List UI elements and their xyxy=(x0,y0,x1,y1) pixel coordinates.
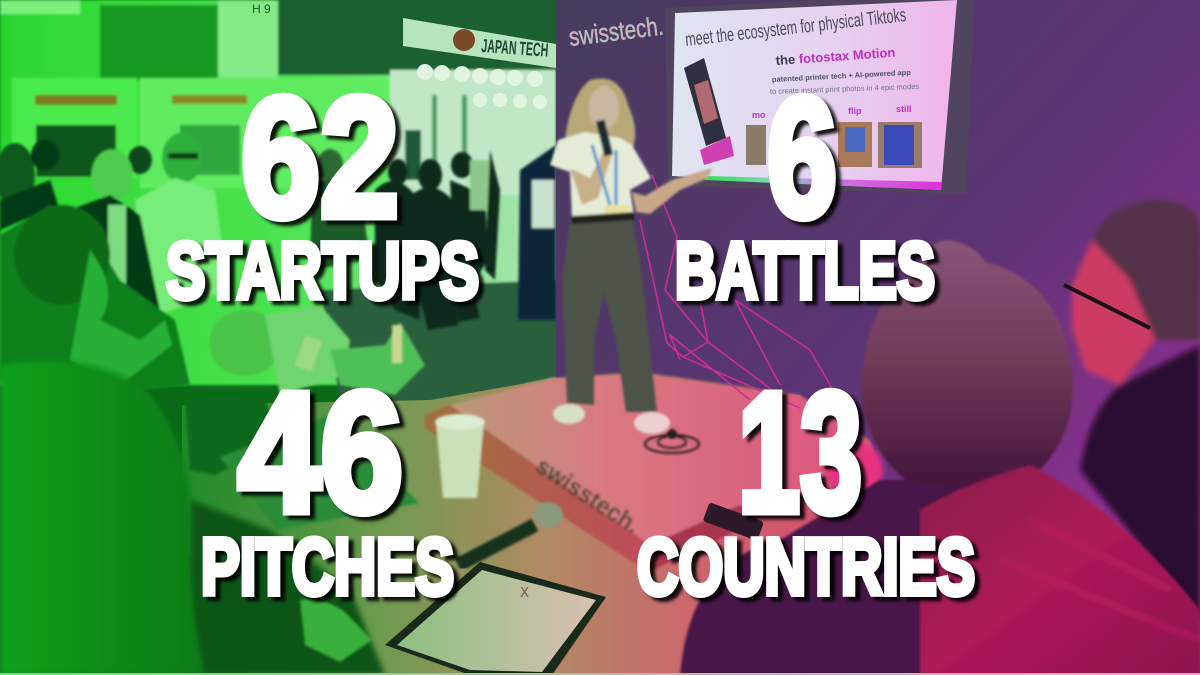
t-shirt xyxy=(550,132,651,218)
speaker on stage xyxy=(550,78,712,453)
bottom edge strip xyxy=(0,673,1200,675)
lanyard and badge xyxy=(592,145,616,205)
microphone xyxy=(596,119,613,156)
screen phone xyxy=(684,58,726,146)
label countries: COUNTRIES xyxy=(637,522,975,611)
dark laptop on table xyxy=(220,415,419,530)
left audience xyxy=(0,133,425,395)
screen subheading: the fotostax Motion xyxy=(775,45,896,68)
hair xyxy=(564,78,635,150)
foreground hand xyxy=(300,599,372,662)
Japan Tech sign: JAPAN TECH xyxy=(481,36,549,62)
jacket xyxy=(1080,345,1200,620)
dark suit man xyxy=(91,149,133,201)
red vest xyxy=(920,465,1200,675)
face xyxy=(1072,240,1155,385)
presentation screen: to create instant print photos in 4 epic modes xyxy=(770,82,919,96)
carpet xyxy=(320,280,556,405)
label startups: STARTUPS xyxy=(166,226,479,315)
bald man xyxy=(209,310,281,376)
sign: swisstech: swisstech. xyxy=(567,11,665,52)
phone on table xyxy=(703,502,764,541)
right arm xyxy=(632,168,712,214)
glasses xyxy=(1064,285,1150,328)
table xyxy=(182,378,900,675)
stage platform: swisstech. xyxy=(531,452,644,539)
left arm xyxy=(570,150,612,205)
stage platform xyxy=(425,372,880,572)
number 62: 62 xyxy=(241,63,399,253)
screen photos xyxy=(746,125,766,165)
foreground attendee: blond xyxy=(680,240,1073,675)
neon wall lines xyxy=(640,175,850,408)
shoes xyxy=(553,404,585,424)
purple wall xyxy=(556,0,1200,675)
foreground attendee: left xyxy=(0,361,205,675)
presentation screen: still xyxy=(896,104,912,114)
trousers xyxy=(562,218,657,412)
stat: 62 startups xyxy=(166,63,479,315)
label pitches: PITCHES xyxy=(201,522,454,611)
expo hall background xyxy=(0,0,556,405)
foreground man xyxy=(0,205,190,395)
presentation screen xyxy=(665,0,975,194)
pillar label: H 9 xyxy=(252,2,271,16)
microphone on table xyxy=(458,502,563,565)
hanging lanterns xyxy=(417,64,547,109)
left edge people xyxy=(0,143,35,207)
number 13: 13 xyxy=(738,358,862,548)
dark sleeve area xyxy=(190,500,385,675)
stat: 6 battles xyxy=(675,63,935,315)
man with glasses xyxy=(162,133,202,183)
face xyxy=(589,86,619,130)
Japan Tech sign xyxy=(403,18,556,68)
stat: 46 pitches xyxy=(201,358,454,611)
tablet on table xyxy=(385,562,606,675)
stat: 13 countries xyxy=(637,358,975,611)
coffee cup xyxy=(435,414,485,498)
label battles: BATTLES xyxy=(675,226,935,315)
tablet on table: x xyxy=(520,581,529,601)
hair xyxy=(1090,200,1200,340)
cable xyxy=(645,430,699,453)
number 46: 46 xyxy=(238,358,403,548)
pink glow xyxy=(827,442,883,498)
sleeve on table xyxy=(185,392,285,475)
belt xyxy=(572,212,634,224)
presentation screen: mo xyxy=(752,110,766,120)
presentation screen: flip xyxy=(848,106,862,116)
background crowd xyxy=(310,145,556,330)
number 6: 6 xyxy=(767,63,837,253)
screen text: patented printer tech + AI-powered app xyxy=(772,68,911,84)
foreground attendee: right man xyxy=(1072,200,1200,620)
